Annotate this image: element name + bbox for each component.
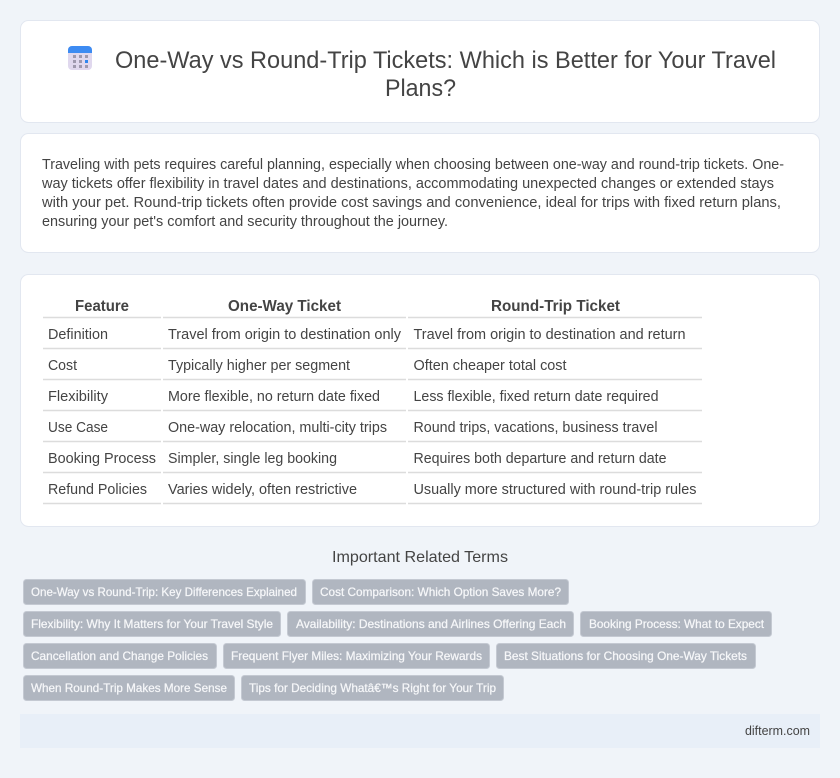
tag bbox=[24, 644, 216, 668]
tag bbox=[288, 612, 574, 636]
row: flexibility: More flexible, no return date fixed bbox=[168, 389, 380, 405]
row: booking process bbox=[48, 451, 666, 467]
intro text: ensuring your pet's comfort and security throughout the journey. bbox=[42, 214, 448, 230]
footer: difterm.com bbox=[745, 723, 810, 738]
table header: Feature bbox=[75, 298, 129, 315]
row: use case: Use Case bbox=[48, 420, 108, 436]
tag bbox=[224, 644, 490, 668]
tag bbox=[24, 612, 280, 636]
row: flexibility: Flexibility bbox=[48, 389, 109, 405]
row: definition: Travel from origin to destination and return bbox=[414, 327, 686, 343]
intro text: with your pet. Round-trip tickets often provide cost savings and convenience, ideal for trips with fixed return plans, bbox=[41, 195, 781, 211]
row: use case: Round trips, vacations, business travel bbox=[414, 420, 658, 436]
row: definition: Definition bbox=[48, 327, 108, 343]
tag bbox=[580, 612, 772, 636]
table header bbox=[75, 298, 621, 315]
tag: When Round-Trip Makes More Sense bbox=[31, 681, 227, 695]
title bbox=[115, 47, 776, 102]
heading: related terms: Important Related Terms bbox=[332, 549, 508, 566]
row: definition bbox=[48, 327, 686, 343]
footer bbox=[20, 714, 820, 748]
tag: Flexibility: Why It Matters for Your Travel Style bbox=[31, 617, 273, 631]
table header: One-Way Ticket bbox=[228, 298, 342, 315]
tag bbox=[312, 580, 568, 604]
panel: comparison table bbox=[20, 274, 820, 526]
intro text bbox=[41, 157, 784, 230]
tag: Best Situations for Choosing One-Way Tickets bbox=[504, 649, 747, 663]
tag bbox=[496, 644, 756, 668]
intro text: Traveling with pets requires careful planning, especially when choosing between one-way and round-trip tickets. One- bbox=[42, 157, 784, 173]
row: booking process: Simpler, single leg booking bbox=[168, 451, 337, 467]
row: cost: Cost bbox=[48, 358, 77, 374]
tag: Availability: Destinations and Airlines Offering Each bbox=[296, 617, 566, 631]
row: booking process: Booking Process bbox=[48, 451, 156, 467]
row: refund policies: Refund Policies bbox=[48, 482, 147, 498]
row: use case bbox=[48, 420, 658, 436]
tag bbox=[24, 580, 306, 604]
intro text: way tickets offer flexibility in travel dates and destinations, accommodating unexpected changes or extended stays bbox=[41, 176, 774, 192]
tag: Frequent Flyer Miles: Maximizing Your Rewards bbox=[231, 649, 482, 663]
title: Plans? bbox=[385, 75, 456, 102]
row: cost: Typically higher per segment bbox=[168, 358, 350, 374]
row: refund policies: Usually more structured with round-trip rules bbox=[414, 482, 696, 498]
related terms tags bbox=[24, 580, 772, 700]
title: One-Way vs Round-Trip Tickets: Which is Better for Your Travel bbox=[115, 47, 776, 74]
tag: Cost Comparison: Which Option Saves More? bbox=[320, 585, 561, 599]
row: definition: Travel from origin to destination only bbox=[168, 327, 402, 343]
tag bbox=[24, 676, 234, 700]
tag: Booking Process: What to Expect bbox=[589, 617, 765, 631]
row: refund policies: Varies widely, often restrictive bbox=[168, 482, 357, 498]
tag bbox=[242, 676, 504, 700]
table header: Round-Trip Ticket bbox=[491, 298, 621, 315]
icon: calendar bbox=[68, 46, 92, 70]
row: cost: Often cheaper total cost bbox=[414, 358, 566, 374]
header panel bbox=[20, 20, 820, 122]
panel: introduction bbox=[20, 134, 820, 252]
row: flexibility: Less flexible, fixed return date required bbox=[414, 389, 658, 405]
row: flexibility bbox=[48, 389, 658, 405]
tag: Cancellation and Change Policies bbox=[31, 649, 208, 663]
row: use case: One-way relocation, multi-city trips bbox=[168, 420, 387, 436]
tag: One-Way vs Round-Trip: Key Differences Explained bbox=[31, 585, 297, 599]
row: refund policies bbox=[48, 482, 696, 498]
row: booking process: Requires both departure and return date bbox=[414, 451, 666, 467]
row: cost bbox=[48, 358, 566, 374]
tag: Tips for Deciding Whatâ€™s Right for Your Trip bbox=[249, 681, 496, 695]
